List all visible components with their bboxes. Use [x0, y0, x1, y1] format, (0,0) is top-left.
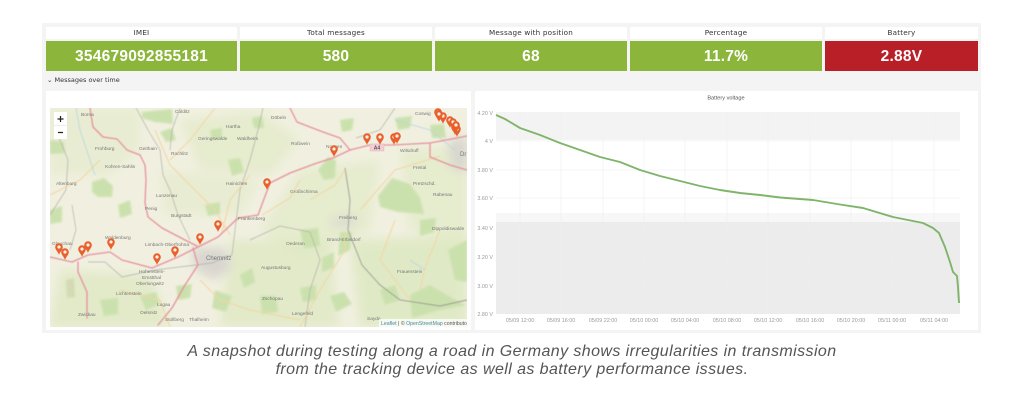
y axis labels: 3.00 V [477, 284, 493, 290]
place labels: Lunzenau [156, 193, 177, 199]
place labels: Zwickau [78, 312, 96, 318]
place labels: Altenburg [56, 181, 77, 187]
place labels: Freital [413, 165, 426, 171]
x axis labels: 05/10 20:00 [837, 318, 865, 324]
stat: IMEI: IMEI [134, 28, 149, 37]
x axis labels: 05/11 00:00 [878, 318, 906, 324]
x axis labels: 05/10 00:00 [630, 318, 658, 324]
y axis labels: 3.80 V [477, 168, 493, 174]
place labels: Brand-Erbisdorf [327, 237, 361, 243]
place labels: Limbach-Oberfrohna [145, 242, 189, 248]
place labels: Oelsnitz [140, 310, 158, 316]
chart title: Battery voltage [707, 96, 745, 102]
place labels: Lugau [157, 302, 171, 308]
caption: from the tracking device as well as battery performance issues. [276, 361, 748, 378]
stat: percentage: 11.7% [704, 48, 748, 65]
place labels: Glauchau [52, 241, 73, 247]
place labels: Waldheim [237, 136, 258, 142]
x axis labels: 05/10 16:00 [796, 318, 824, 324]
map [50, 108, 467, 327]
place labels: Nossen [326, 144, 343, 150]
x axis labels: 05/10 08:00 [713, 318, 741, 324]
place labels: Rochlitz [171, 151, 189, 157]
place labels: Roßwein [291, 141, 310, 147]
place labels: Dippoldiswalde [432, 226, 465, 232]
place labels: Frohburg [95, 146, 115, 152]
minor roads and rivers [50, 108, 467, 327]
stat: percentage: Percentage [705, 28, 747, 37]
threshold bands [496, 112, 960, 314]
x axis labels: 05/10 12:00 [754, 318, 782, 324]
place labels: Geringswalde [198, 136, 228, 142]
x axis labels: 05/09 22:00 [589, 318, 617, 324]
place labels: Oederan [286, 241, 305, 247]
place labels: Geithain [139, 146, 157, 152]
stat: total messages: Total messages [307, 28, 365, 37]
stat: message with position: 68 [522, 48, 540, 65]
place labels: Sayda [367, 316, 381, 322]
stat: message with position: Message with position [489, 28, 573, 37]
y axis labels: 2.80 V [477, 312, 493, 318]
y axis labels: 3.60 V [477, 196, 493, 202]
caption: A snapshot during testing along a road in Germany shows irregularities in transmission [187, 343, 837, 360]
place labels: Colditz [175, 109, 190, 115]
stat: IMEI: 354679092855181 [75, 48, 208, 65]
stat: percentage [630, 27, 822, 71]
stat: message with position [435, 27, 627, 71]
y axis labels [477, 111, 493, 318]
x axis labels [506, 318, 948, 324]
panel: map [46, 91, 471, 330]
line chart: battery voltage [477, 96, 960, 324]
place labels: Rabenau [433, 192, 453, 198]
stat: battery [825, 27, 978, 71]
place labels: Frauenstein [397, 269, 423, 275]
place labels: Burgstädt [171, 213, 192, 219]
y axis labels: 3.20 V [477, 255, 493, 261]
A4 shield [370, 144, 384, 152]
x axis labels: 05/10 04:00 [671, 318, 699, 324]
place labels: Dr [460, 152, 466, 158]
place labels: Freiberg [339, 215, 357, 221]
caption [186, 343, 837, 378]
place labels: Chemnitz [206, 256, 231, 262]
place labels: Stollberg [165, 317, 184, 323]
section heading: ⌄ Messages over time [47, 76, 120, 84]
place labels: Hartha [226, 124, 241, 130]
map base terrain [50, 108, 467, 327]
place labels: Lengefeld [292, 311, 313, 317]
place labels: Coswig [415, 111, 431, 117]
place labels: Döbeln [271, 115, 287, 121]
place labels: Oberlungwitz [136, 281, 165, 287]
stat: total messages [240, 27, 432, 71]
y axis labels: 3.40 V [477, 226, 493, 232]
place labels: Hohenstein- [139, 269, 165, 275]
place labels: Frankenberg [238, 216, 266, 222]
place labels [52, 109, 466, 323]
panel: battery voltage chart [475, 91, 978, 330]
route pins [55, 108, 461, 265]
place labels: Kohren-Sahlis [105, 164, 136, 170]
place labels: Zschopau [262, 296, 283, 302]
y axis labels: 4.20 V [477, 111, 493, 117]
place labels: Thalheim [189, 317, 209, 323]
place labels: Wilsdruff [400, 148, 419, 154]
stat: IMEI [46, 27, 237, 71]
x axis labels: 05/09 16:00 [547, 318, 575, 324]
place labels: Augustusburg [261, 265, 291, 271]
place labels: Großschirma [290, 189, 318, 195]
zoom control [54, 112, 67, 139]
place labels: Penig [145, 206, 158, 212]
x axis labels: 05/09 12:00 [506, 318, 534, 324]
stat: total messages: 580 [323, 48, 349, 65]
place labels: Hainichen [226, 181, 248, 187]
voltage curve [496, 115, 959, 303]
motorways [50, 108, 467, 325]
attribution [379, 319, 472, 327]
stat: battery: 2.88V [881, 48, 922, 65]
y axis labels: 4 V [485, 139, 493, 145]
place labels: Lichtenstein [116, 291, 142, 297]
A4 shield: A4 [374, 146, 380, 152]
urban areas [192, 136, 467, 280]
place labels: Ernstthal [142, 275, 161, 281]
place labels: Borna [81, 112, 94, 118]
place labels: Pretzschd. [413, 181, 436, 187]
place labels: Waldenburg [105, 235, 131, 241]
dashboard panel [42, 23, 981, 333]
stat: battery: Battery [887, 28, 916, 37]
x axis labels: 05/11 04:00 [920, 318, 948, 324]
